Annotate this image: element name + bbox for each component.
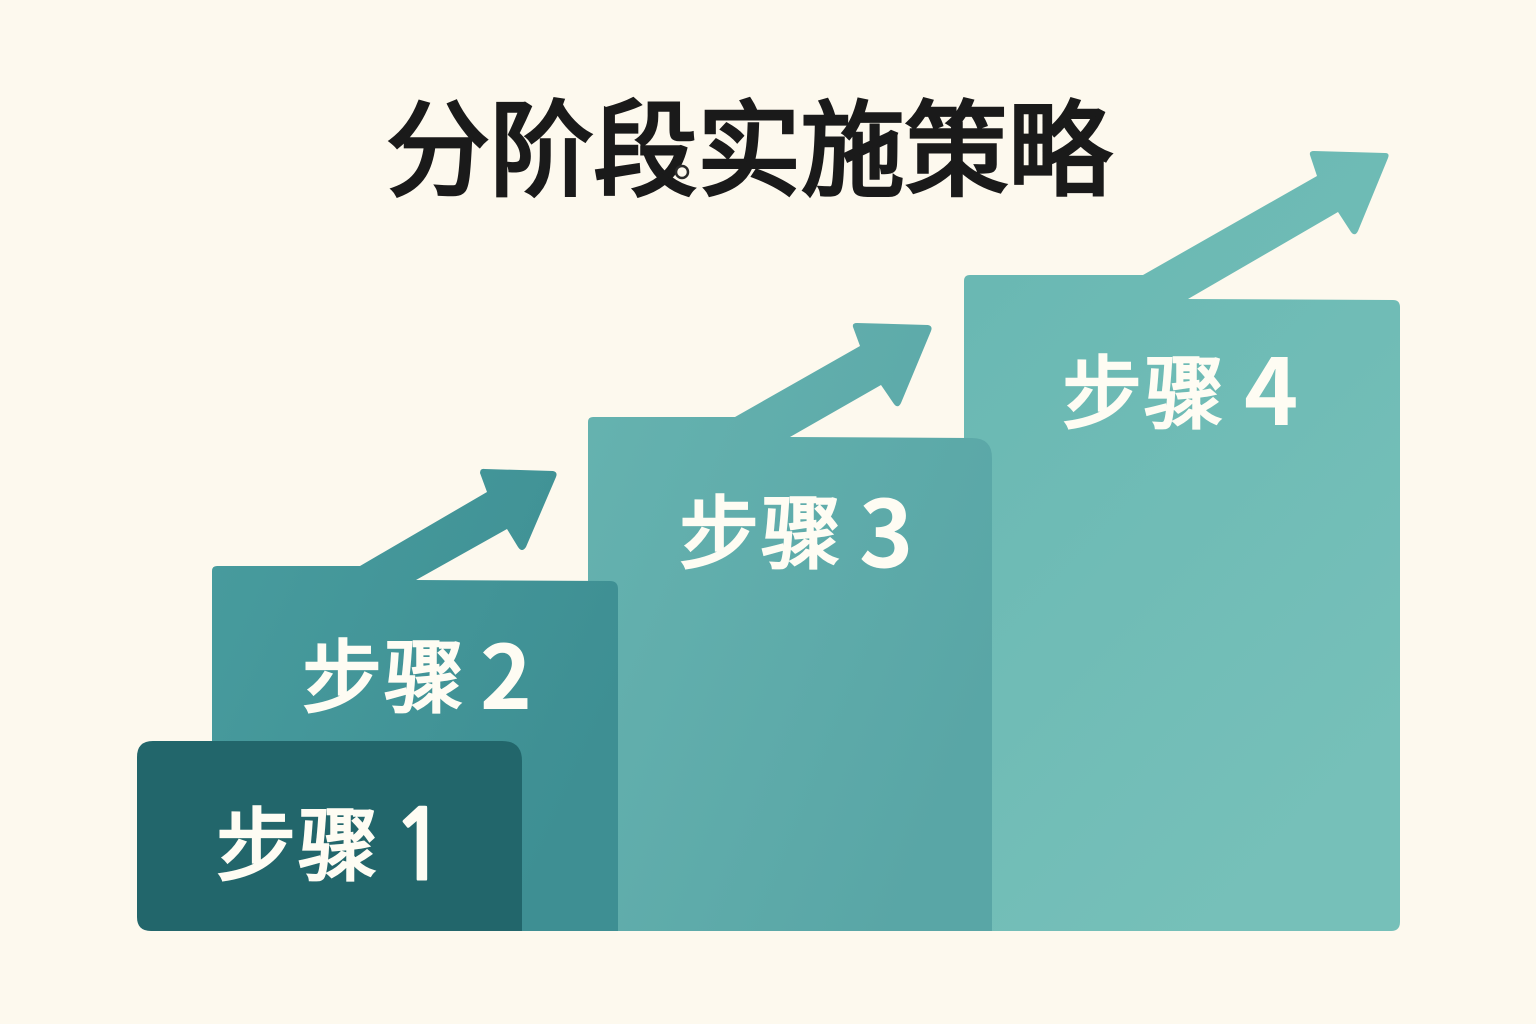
label: step 2 — [302, 608, 532, 735]
label: step 2: 步骤 — [302, 634, 464, 723]
label: step 3: 步骤 — [679, 490, 841, 579]
title artifact: small ring — [676, 166, 688, 178]
panel: step 3 — [588, 323, 992, 931]
label: step 1: 步骤 — [216, 802, 378, 891]
block and arrow: step 3 — [588, 323, 992, 931]
title: 分阶段实施策略 — [386, 94, 1112, 210]
label: step 3: 3 — [859, 461, 913, 594]
panel: step 4 — [964, 151, 1400, 931]
label: step 4: 4 — [1244, 319, 1298, 452]
label: step 4: 步骤 — [1062, 350, 1224, 439]
panel: step 1 — [137, 741, 522, 931]
block: step 1 — [137, 741, 522, 931]
block and arrow: step 4 — [964, 151, 1400, 931]
label: step 4 — [1062, 319, 1298, 452]
label: step 1 — [216, 798, 449, 895]
label: step 3 — [679, 461, 913, 594]
label: step 1: 1 — [390, 798, 449, 895]
label: step 2: 2 — [480, 608, 532, 735]
panel: step 2 — [212, 469, 618, 931]
block and arrow: step 2 — [212, 469, 618, 931]
